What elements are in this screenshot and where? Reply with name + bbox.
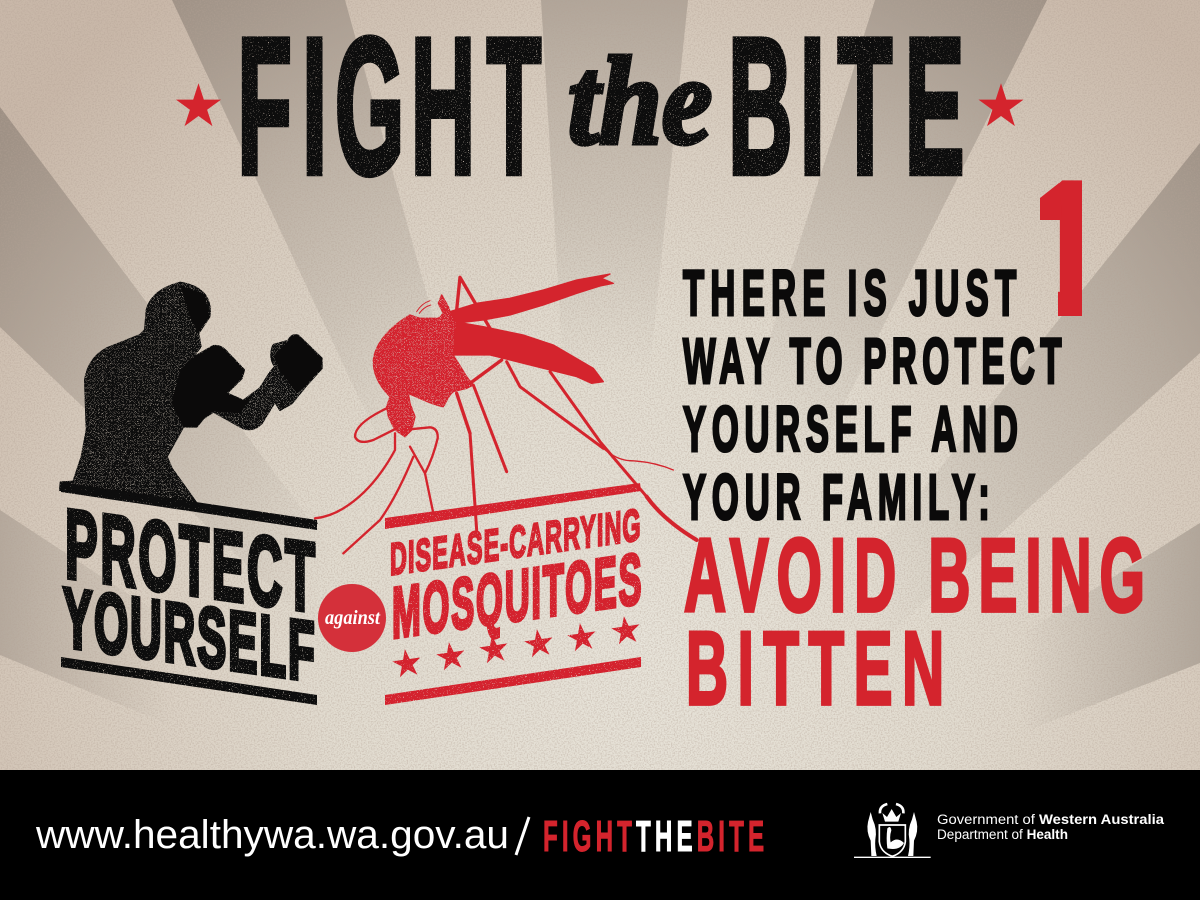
- footer bar: [0, 770, 1200, 900]
- illustration: boxer silhouette: [60, 283, 322, 523]
- government and department text: Department of Health: [937, 827, 1068, 842]
- text block: message: THERE IS JUST: [683, 257, 1016, 329]
- badge: against: [318, 584, 386, 652]
- icon: title star left: [176, 83, 221, 126]
- text block: message: YOUR FAMILY:: [683, 461, 990, 533]
- slash divider: [516, 817, 529, 855]
- number: 1: [1040, 180, 1082, 316]
- panel: disease-carrying mosquitoes stamp: [385, 483, 642, 705]
- callout: avoid being bitten: AVOID BEING: [684, 517, 1145, 633]
- callout: avoid being bitten: [684, 517, 1145, 726]
- title: Fight the Bite: the: [568, 33, 712, 171]
- icon: row of six stars: [391, 614, 642, 678]
- panel: protect yourself stamp: YOURSELF: [63, 571, 315, 700]
- panel: protect yourself stamp: [61, 482, 317, 705]
- panel: disease-carrying mosquitoes stamp: DISEASE-CARRYING: [390, 498, 641, 585]
- callout: avoid being bitten: BITTEN: [686, 610, 944, 726]
- government and department text: Government of Western Australia: [937, 812, 1165, 827]
- website address: www.healthywa.wa.gov.au: [35, 813, 509, 857]
- government and department text: [937, 812, 1165, 842]
- campaign wordmark: FIGHTTHEBITE: [543, 811, 764, 861]
- panel: disease-carrying mosquitoes stamp: MOSQUITOES: [392, 538, 642, 653]
- panel: protect yourself stamp: PROTECT: [65, 490, 315, 633]
- text block: message: [683, 257, 1062, 533]
- illustration: mosquito: [315, 274, 697, 553]
- badge: against: against: [325, 607, 381, 629]
- logo: WA coat of arms: [854, 804, 931, 858]
- icon: title star right: [978, 83, 1024, 126]
- text block: message: WAY TO PROTECT: [683, 325, 1062, 397]
- title: Fight the Bite: FIGHT: [237, 0, 541, 214]
- text block: message: YOURSELF AND: [683, 393, 1018, 465]
- title: Fight the Bite: [237, 0, 964, 214]
- number: 1: 1: [1030, 143, 1106, 355]
- title: Fight the Bite: BITE: [728, 0, 964, 214]
